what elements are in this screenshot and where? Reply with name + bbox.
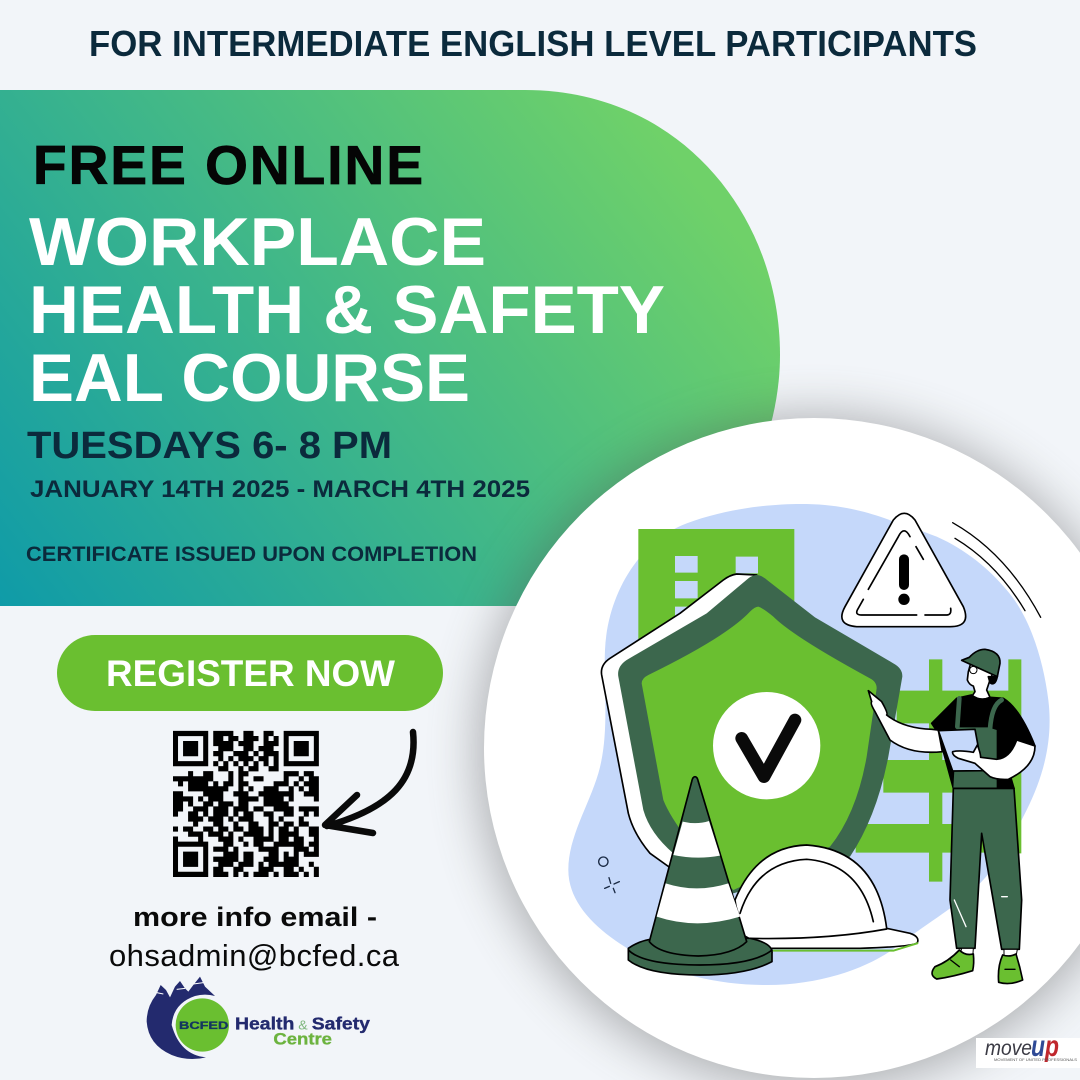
course title: WORKPLACE <box>29 204 486 280</box>
hard hat on head <box>962 649 1000 677</box>
schedule: TUESDAYS 6- 8 PM <box>27 425 392 467</box>
logo: moveUP <box>976 1030 1080 1068</box>
logo: moveUP: move <box>985 1037 1032 1060</box>
holding arm <box>953 740 1035 779</box>
arrow to QR code <box>325 732 414 833</box>
shoes <box>932 950 974 979</box>
contact label: more info email - <box>133 902 377 932</box>
socks <box>960 948 1017 958</box>
heading: free online: FREE ONLINE <box>33 134 423 196</box>
warning sign <box>842 513 966 627</box>
logo snow caps <box>157 983 203 994</box>
belt line <box>953 786 1014 791</box>
contact email: ohsadmin@bcfed.ca <box>109 938 400 973</box>
QR code <box>173 734 319 874</box>
top heading: FOR INTERMEDIATE ENGLISH LEVEL PARTICIPANTS <box>89 23 977 64</box>
shield green face <box>642 607 877 890</box>
course title: HEALTH & SAFETY <box>29 272 665 348</box>
overalls bib <box>953 727 997 789</box>
check mark <box>742 720 795 777</box>
illustration: safety scene <box>568 504 1050 985</box>
clipboard <box>938 729 983 771</box>
check badge <box>713 692 820 799</box>
overall straps <box>957 698 1002 729</box>
logo BCFED: BCFED <box>179 1020 228 1032</box>
glasses <box>970 666 977 674</box>
pointing arm <box>868 691 942 752</box>
logo name line 1: Health & Safety <box>235 1013 370 1033</box>
scaffold <box>856 659 1021 882</box>
logo: moveUP: MOVEMENT OF UNITED PROFESSIONALS <box>994 1057 1077 1062</box>
logo name line 2: Centre <box>273 1029 332 1048</box>
building <box>638 529 794 650</box>
register button: REGISTER NOW <box>106 653 395 694</box>
shield dark rim <box>618 575 902 893</box>
logo: BCFED Health & Safety Centre <box>147 977 370 1059</box>
blue blob <box>568 504 1050 985</box>
logo mountains crescent <box>147 977 215 1059</box>
shield white edge <box>601 574 757 870</box>
worker <box>868 649 1035 984</box>
certificate note: CERTIFICATE ISSUED UPON COMPLETION <box>26 543 477 566</box>
trousers <box>950 788 1022 949</box>
dates: JANUARY 14TH 2025 - MARCH 4TH 2025 <box>30 476 530 503</box>
illustration circle <box>484 418 1080 1078</box>
head <box>967 663 993 699</box>
logo green disc <box>176 998 229 1052</box>
course title: EAL COURSE <box>29 340 470 416</box>
hard hat <box>735 845 918 951</box>
motion lines <box>953 523 1041 617</box>
panel: course details gradient <box>0 90 780 606</box>
small decorations <box>599 857 619 893</box>
black t-shirt <box>932 695 1035 788</box>
traffic cone <box>628 777 772 975</box>
shield <box>601 574 902 893</box>
circle shadow <box>478 416 1080 1080</box>
register button <box>57 635 443 711</box>
hair <box>988 677 997 684</box>
logo: moveUP: up <box>1031 1030 1059 1063</box>
course title <box>29 204 665 416</box>
